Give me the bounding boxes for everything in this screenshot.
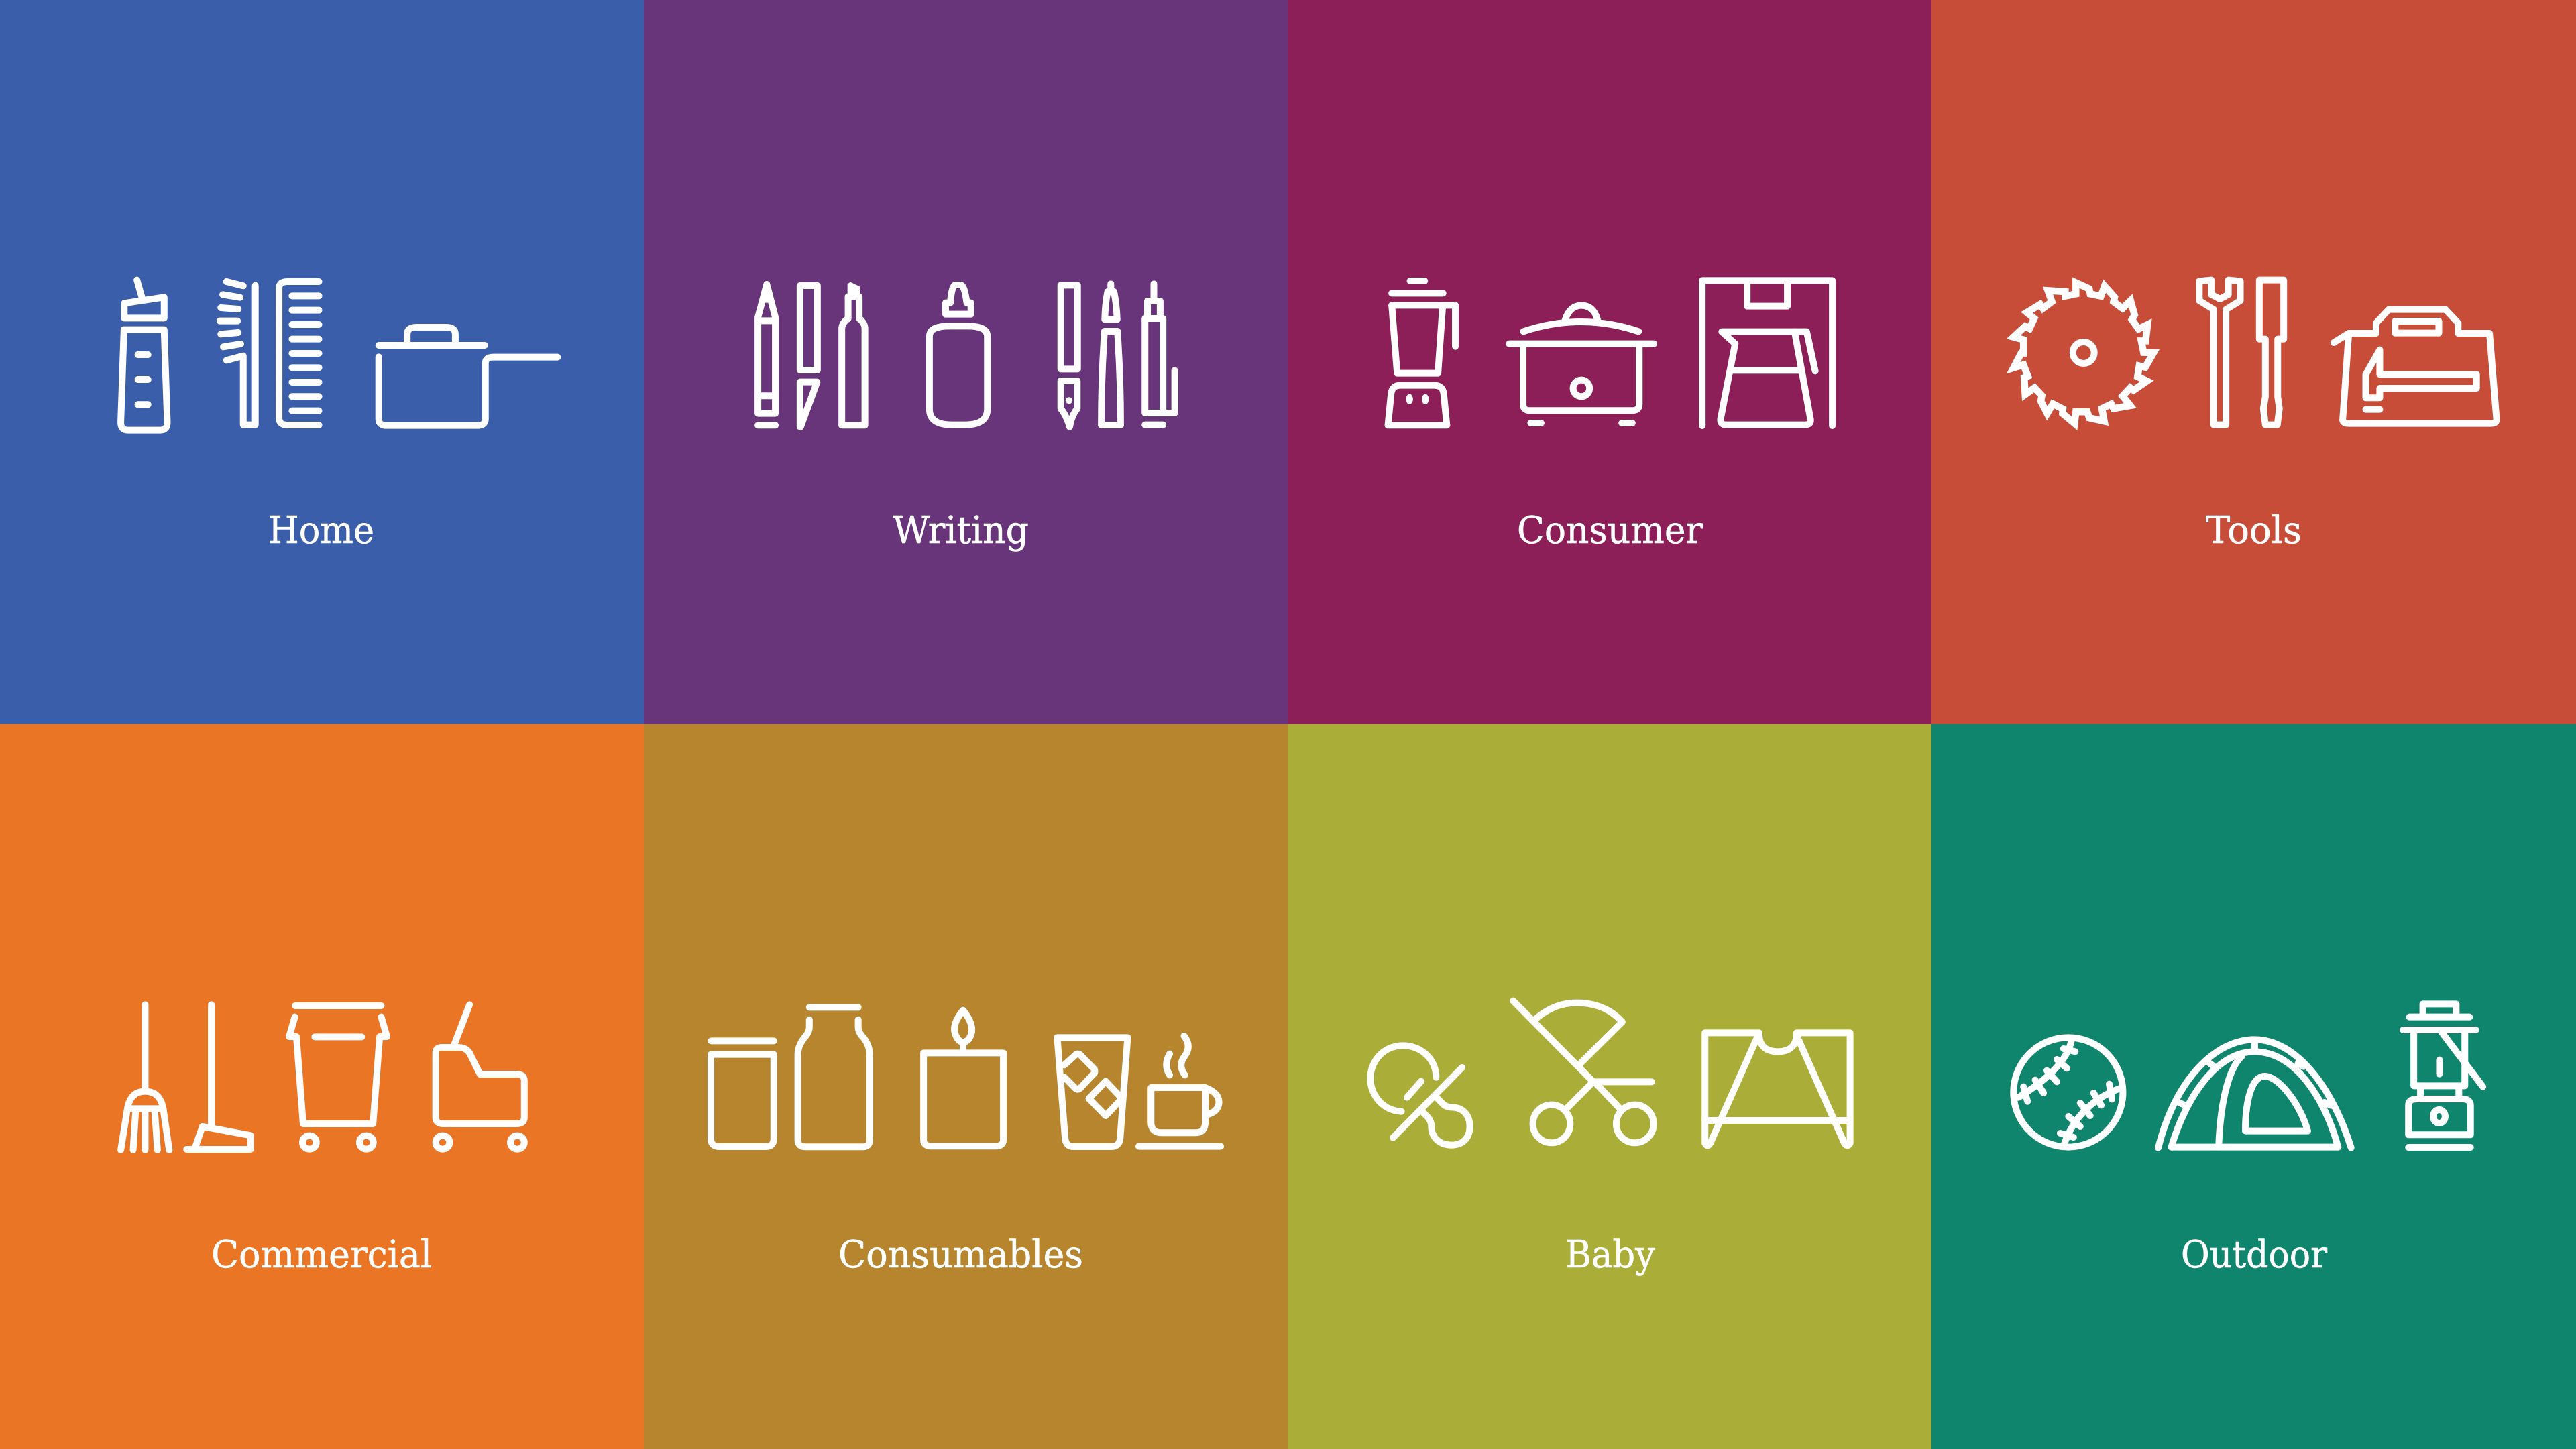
icon: brush <box>220 282 256 425</box>
icons: writing <box>758 282 1175 427</box>
heading: commercial: Commercial <box>211 1233 432 1277</box>
icon: tent <box>2158 1039 2351 1148</box>
panel: outdoor <box>1931 724 2576 1449</box>
panel background: consumer <box>1288 0 1932 725</box>
icon: broom <box>121 1004 169 1150</box>
icons: baby <box>1370 1001 1850 1145</box>
icon: iced drink <box>1057 1037 1127 1147</box>
icon: pencil <box>758 282 775 425</box>
panel background: writing <box>644 0 1288 725</box>
panel: writing <box>644 0 1288 725</box>
heading: outdoor: Outdoor <box>2181 1233 2327 1277</box>
panel background: baby <box>1288 724 1932 1449</box>
icon: saucepan <box>379 327 557 426</box>
heading: consumer: Consumer <box>1517 509 1703 553</box>
icon: toolbox with hammer <box>2334 310 2497 424</box>
icon: stroller <box>1513 1001 1654 1143</box>
icon: blender <box>1388 281 1455 425</box>
icon: slow cooker <box>1509 306 1654 423</box>
heading: baby: Baby <box>1565 1233 1655 1277</box>
panel: consumables <box>644 724 1288 1449</box>
icon: pacifier <box>1370 1045 1470 1145</box>
icon: comb <box>279 282 319 425</box>
icons: consumer <box>1388 280 1832 426</box>
panel: commercial <box>0 724 645 1449</box>
icon: felt pen <box>1101 284 1121 425</box>
icon: saw blade <box>2013 283 2153 424</box>
panel background: home <box>0 0 645 725</box>
icon: marker <box>842 282 865 425</box>
icon: coffee maker <box>1702 280 1832 426</box>
icon: craft knife <box>800 286 818 427</box>
icon: candle <box>923 1010 1003 1146</box>
icon: bib <box>1705 1033 1850 1145</box>
icon: screwdriver <box>2259 280 2284 425</box>
panel background: tools <box>1931 0 2576 725</box>
icon: coffee cup <box>1139 1036 1221 1147</box>
panel: home <box>0 0 645 725</box>
icons: tools <box>2013 280 2497 425</box>
icon: jar <box>711 1041 774 1147</box>
icon: cart <box>436 1004 524 1149</box>
icon: technical pen <box>1145 284 1175 425</box>
icon: baseball <box>2013 1037 2123 1147</box>
icon: wrench <box>2199 280 2241 425</box>
panel background: outdoor <box>1931 724 2576 1449</box>
heading: home: Home <box>268 509 374 553</box>
icon: wheeled bin <box>289 1006 387 1149</box>
icon: lantern <box>2403 1004 2483 1147</box>
icons: consumables <box>711 1007 1221 1147</box>
panel: tools <box>1931 0 2576 725</box>
heading: consumables: Consumables <box>838 1233 1083 1277</box>
panel background: consumables <box>644 724 1288 1449</box>
icon: fountain pen <box>1061 285 1078 427</box>
panel background: commercial <box>0 724 645 1449</box>
heading: writing: Writing <box>893 509 1029 553</box>
icons: commercial <box>121 1004 524 1150</box>
icon: dustpan <box>186 1004 251 1149</box>
panel: baby <box>1288 724 1932 1449</box>
icons: home <box>121 280 557 430</box>
icon: bottle <box>798 1007 870 1147</box>
panel: consumer <box>1288 0 1932 725</box>
heading: tools: Tools <box>2206 509 2302 553</box>
icon: spray bottle <box>121 280 167 430</box>
icons: outdoor <box>2013 1004 2483 1148</box>
icon: glue bottle <box>930 285 987 425</box>
